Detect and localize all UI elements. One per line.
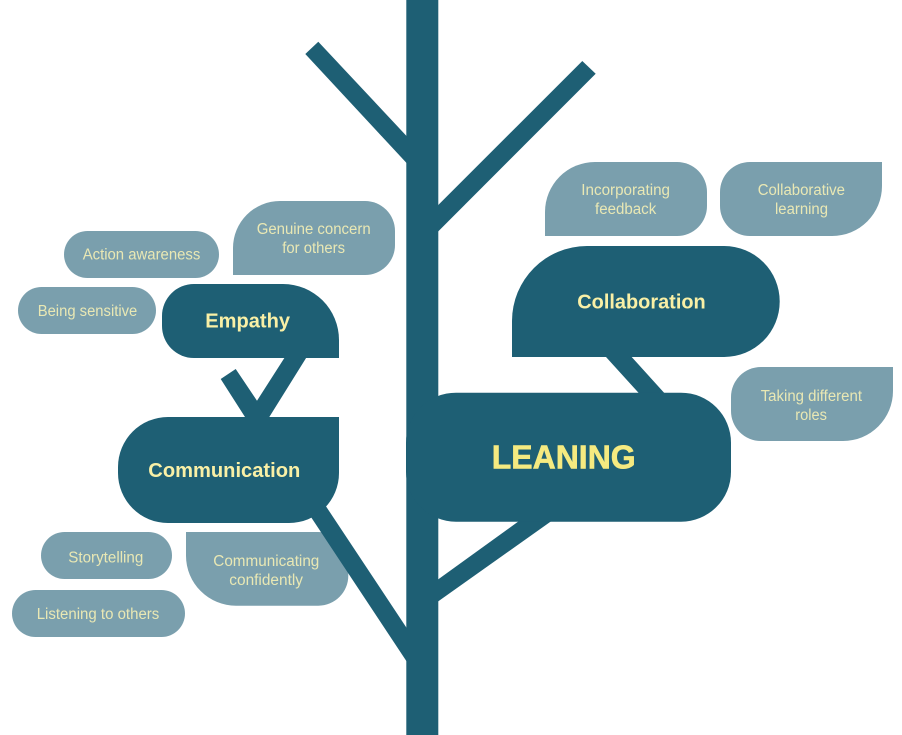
light node: Being sensitive: Being sensitive bbox=[38, 303, 137, 320]
node: Collaboration bbox=[512, 246, 780, 357]
light node: Communicating confidently: Communicating bbox=[213, 553, 319, 570]
node: Empathy bbox=[162, 284, 339, 358]
light node: Genuine concern for others: Genuine concern bbox=[257, 221, 371, 238]
light node: Communicating confidently: confidently bbox=[229, 572, 303, 589]
tree trunk and branches bbox=[221, 0, 664, 735]
main node: LEANING bbox=[406, 393, 731, 522]
light node: Storytelling: Storytelling bbox=[68, 549, 143, 566]
light node: Collaborative learning bbox=[720, 162, 882, 236]
light node: Genuine concern for others bbox=[233, 201, 395, 275]
light node: Being sensitive bbox=[18, 287, 156, 334]
node: Communication: Communication bbox=[148, 460, 300, 482]
light node: Incorporating feedback: Incorporating bbox=[581, 182, 670, 199]
light node: Collaborative learning: learning bbox=[775, 201, 828, 218]
light node: Communicating confidently bbox=[186, 532, 348, 606]
light node: Action awareness: Action awareness bbox=[83, 247, 201, 264]
light node: Collaborative learning: Collaborative bbox=[758, 182, 845, 199]
node: Collaboration: Collaboration bbox=[577, 292, 706, 314]
light node: Taking different roles: roles bbox=[795, 407, 827, 424]
main node: LEANING: LEANING bbox=[492, 439, 636, 476]
node: Communication bbox=[118, 417, 339, 523]
light node: Taking different roles: Taking different bbox=[761, 388, 863, 405]
light node: Incorporating feedback: feedback bbox=[595, 201, 657, 218]
light node: Listening to others bbox=[12, 590, 185, 637]
light node: Incorporating feedback bbox=[545, 162, 707, 236]
light node: Action awareness bbox=[64, 231, 219, 278]
light node: Taking different roles bbox=[731, 367, 893, 441]
node: Empathy: Empathy bbox=[205, 311, 291, 333]
light node: Storytelling bbox=[41, 532, 172, 579]
light node: Genuine concern for others: for others bbox=[282, 240, 345, 257]
light node: Listening to others: Listening to others bbox=[37, 606, 160, 623]
